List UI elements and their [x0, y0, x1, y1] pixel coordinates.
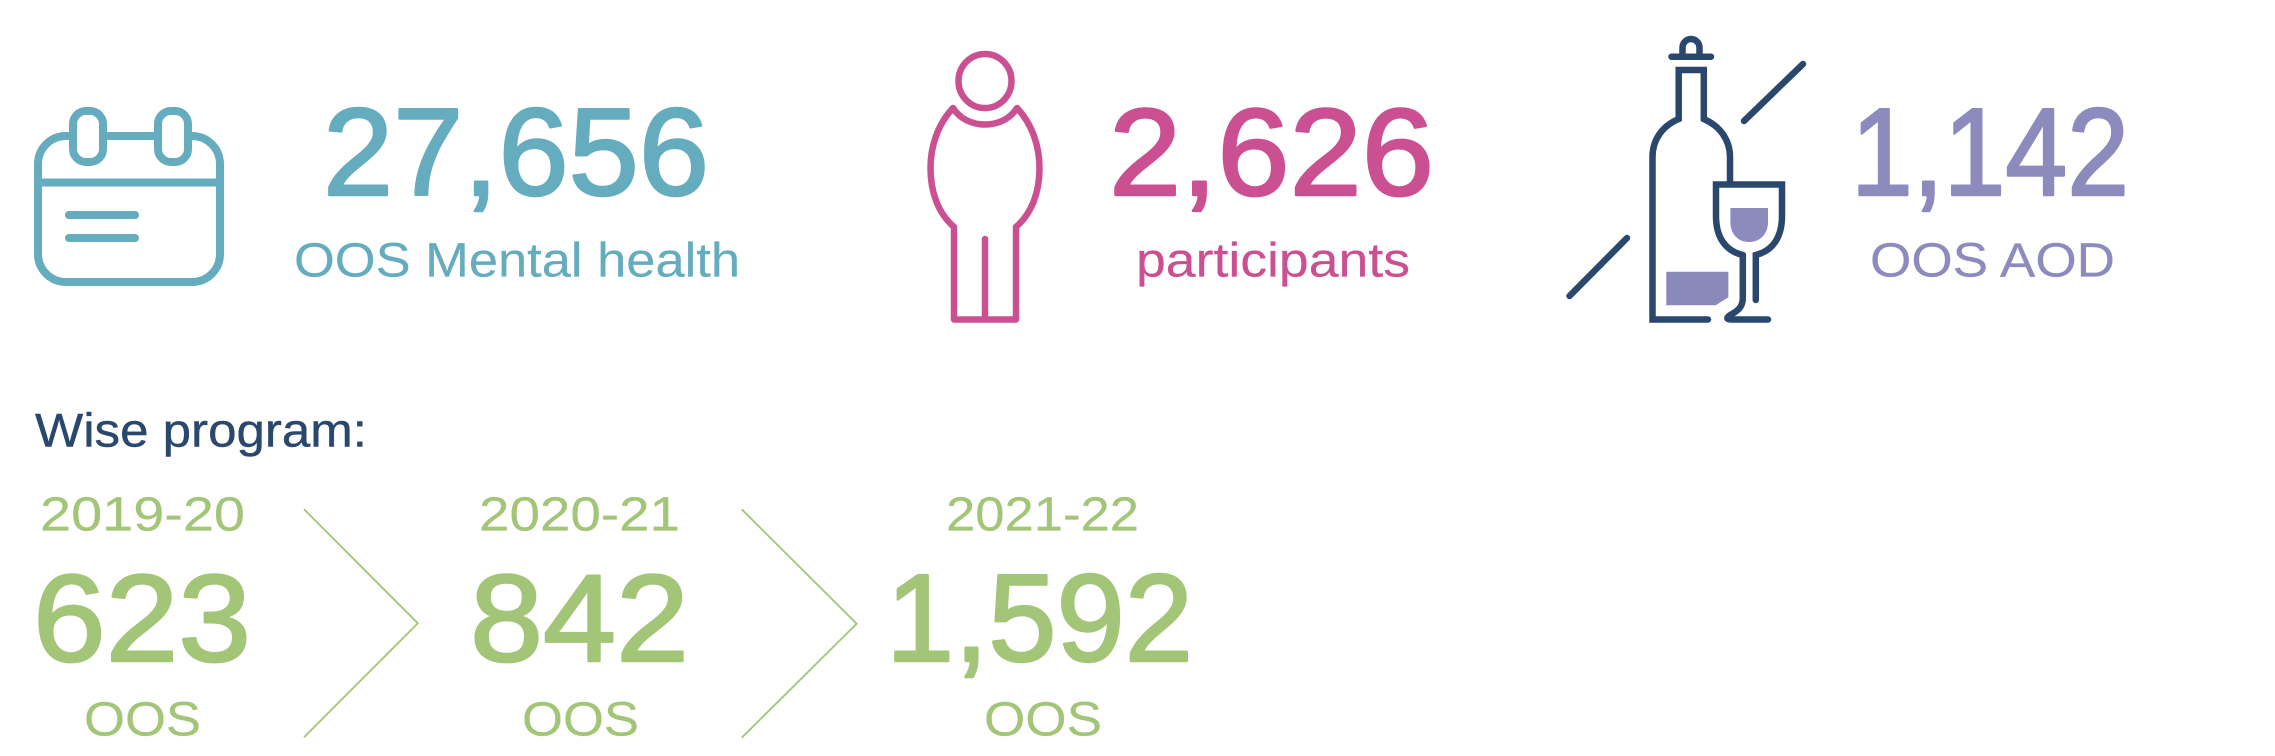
panel: mental health statistic — [38, 84, 740, 288]
panel: participants statistic — [930, 54, 1434, 320]
label: OOS Mental health: OOS Mental health — [294, 234, 740, 288]
label: 2021-22: 2021-22 — [946, 488, 1139, 542]
arrow: chevron one — [304, 509, 418, 737]
label: 2019-20: 2019-20 — [40, 488, 245, 542]
label: OOS: OOS — [84, 694, 201, 746]
arrow: chevron two — [742, 509, 857, 738]
icon: calendar — [38, 111, 220, 282]
label: OOS: OOS — [984, 694, 1102, 746]
number: 1,592: 1,592 — [886, 550, 1193, 688]
panel: AOD statistic — [1570, 39, 2129, 320]
panel: 2020-21 — [470, 488, 689, 746]
number: 27,656: 27,656 — [323, 84, 709, 222]
label: OOS: OOS — [522, 694, 639, 746]
label: OOS AOD: OOS AOD — [1870, 234, 2115, 288]
icon: wine bottle and glass — [1570, 39, 1803, 320]
label: 2020-21: 2020-21 — [479, 488, 680, 542]
label: participants: participants — [1136, 234, 1410, 288]
number: 1,142: 1,142 — [1851, 84, 2129, 222]
number: 842: 842 — [470, 550, 689, 688]
heading: Wise program: Wise program: — [35, 404, 367, 456]
number: 2,626: 2,626 — [1109, 84, 1434, 222]
panel: 2019-20 — [33, 488, 251, 746]
number: 623: 623 — [33, 550, 251, 688]
panel: 2021-22 — [886, 488, 1193, 746]
icon: person — [930, 54, 1040, 320]
